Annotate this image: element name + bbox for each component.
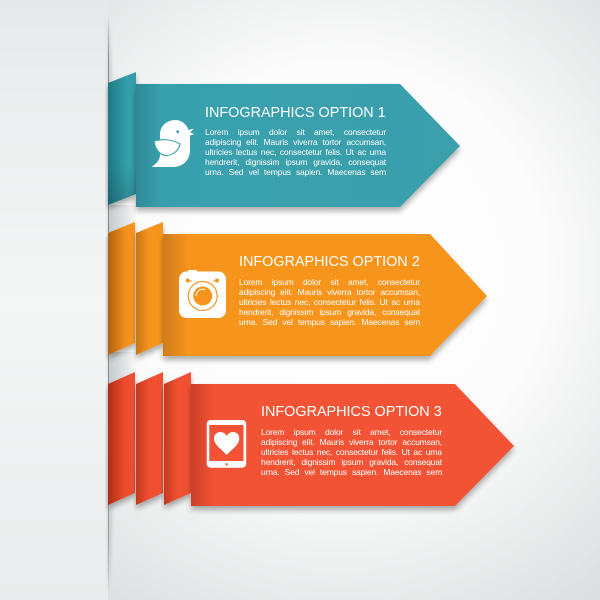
text block: option 1: adipiscing elit. Mauris viverra tortor accumsan, bbox=[205, 137, 386, 147]
text block: option 2: Lorem ipsum dolor sit amet, consectetur bbox=[239, 277, 420, 287]
panel: option 1 bbox=[105, 72, 462, 214]
icon: tablet with heart bbox=[207, 420, 246, 468]
fold: orange second bbox=[136, 222, 163, 355]
text block: option 3: hendrerit, dignissim ipsum gravida, consequat bbox=[261, 457, 442, 467]
fold: red first bbox=[108, 372, 135, 505]
panel: option 3 bbox=[105, 372, 516, 514]
icon: camera bbox=[179, 270, 226, 318]
text block: option 1 bbox=[205, 127, 386, 177]
text block: option 2: ultricies lectus nec, consectetur felis. Ut ac urna bbox=[239, 297, 420, 307]
text block: option 2: hendrerit, dignissim ipsum gravida, consequat bbox=[239, 307, 420, 317]
title: option 3: INFOGRAPHICS OPTION 3 bbox=[261, 404, 442, 420]
text block: option 3 bbox=[261, 427, 442, 477]
text block: option 1: ultricies lectus nec, consectetur felis. Ut ac urna bbox=[205, 147, 386, 157]
text block: option 2 bbox=[239, 277, 420, 327]
arrow: orange bbox=[163, 234, 487, 356]
title: option 2: INFOGRAPHICS OPTION 2 bbox=[239, 254, 420, 270]
text block: option 3: urna. Sed vel tempus sapien. Maecenas sem bbox=[261, 467, 442, 477]
text block: option 3: Lorem ipsum dolor sit amet, consectetur bbox=[261, 427, 442, 437]
fold: red third bbox=[164, 372, 191, 505]
text block: option 2: urna. Sed vel tempus sapien. Maecenas sem bbox=[239, 317, 420, 327]
text block: option 2: adipiscing elit. Mauris viverra tortor accumsan, bbox=[239, 287, 420, 297]
fold: red second bbox=[136, 372, 163, 505]
text block: option 3: adipiscing elit. Mauris viverra tortor accumsan, bbox=[261, 437, 442, 447]
text block: option 1: Lorem ipsum dolor sit amet, consectetur bbox=[205, 127, 386, 137]
arrow: teal bbox=[136, 84, 460, 207]
text block: option 1: urna. Sed vel tempus sapien. Maecenas sem bbox=[205, 167, 386, 177]
text block: option 1: hendrerit, dignissim ipsum gravida, consequat bbox=[205, 157, 386, 167]
fold: orange first bbox=[108, 222, 135, 355]
title: option 1: INFOGRAPHICS OPTION 1 bbox=[205, 104, 386, 120]
arrow: red bbox=[191, 384, 514, 506]
icon: bird bbox=[152, 120, 194, 167]
panel: option 2 bbox=[105, 222, 489, 364]
text block: option 3: ultricies lectus nec, consectetur felis. Ut ac urna bbox=[261, 447, 442, 457]
fold: teal bbox=[108, 72, 136, 205]
